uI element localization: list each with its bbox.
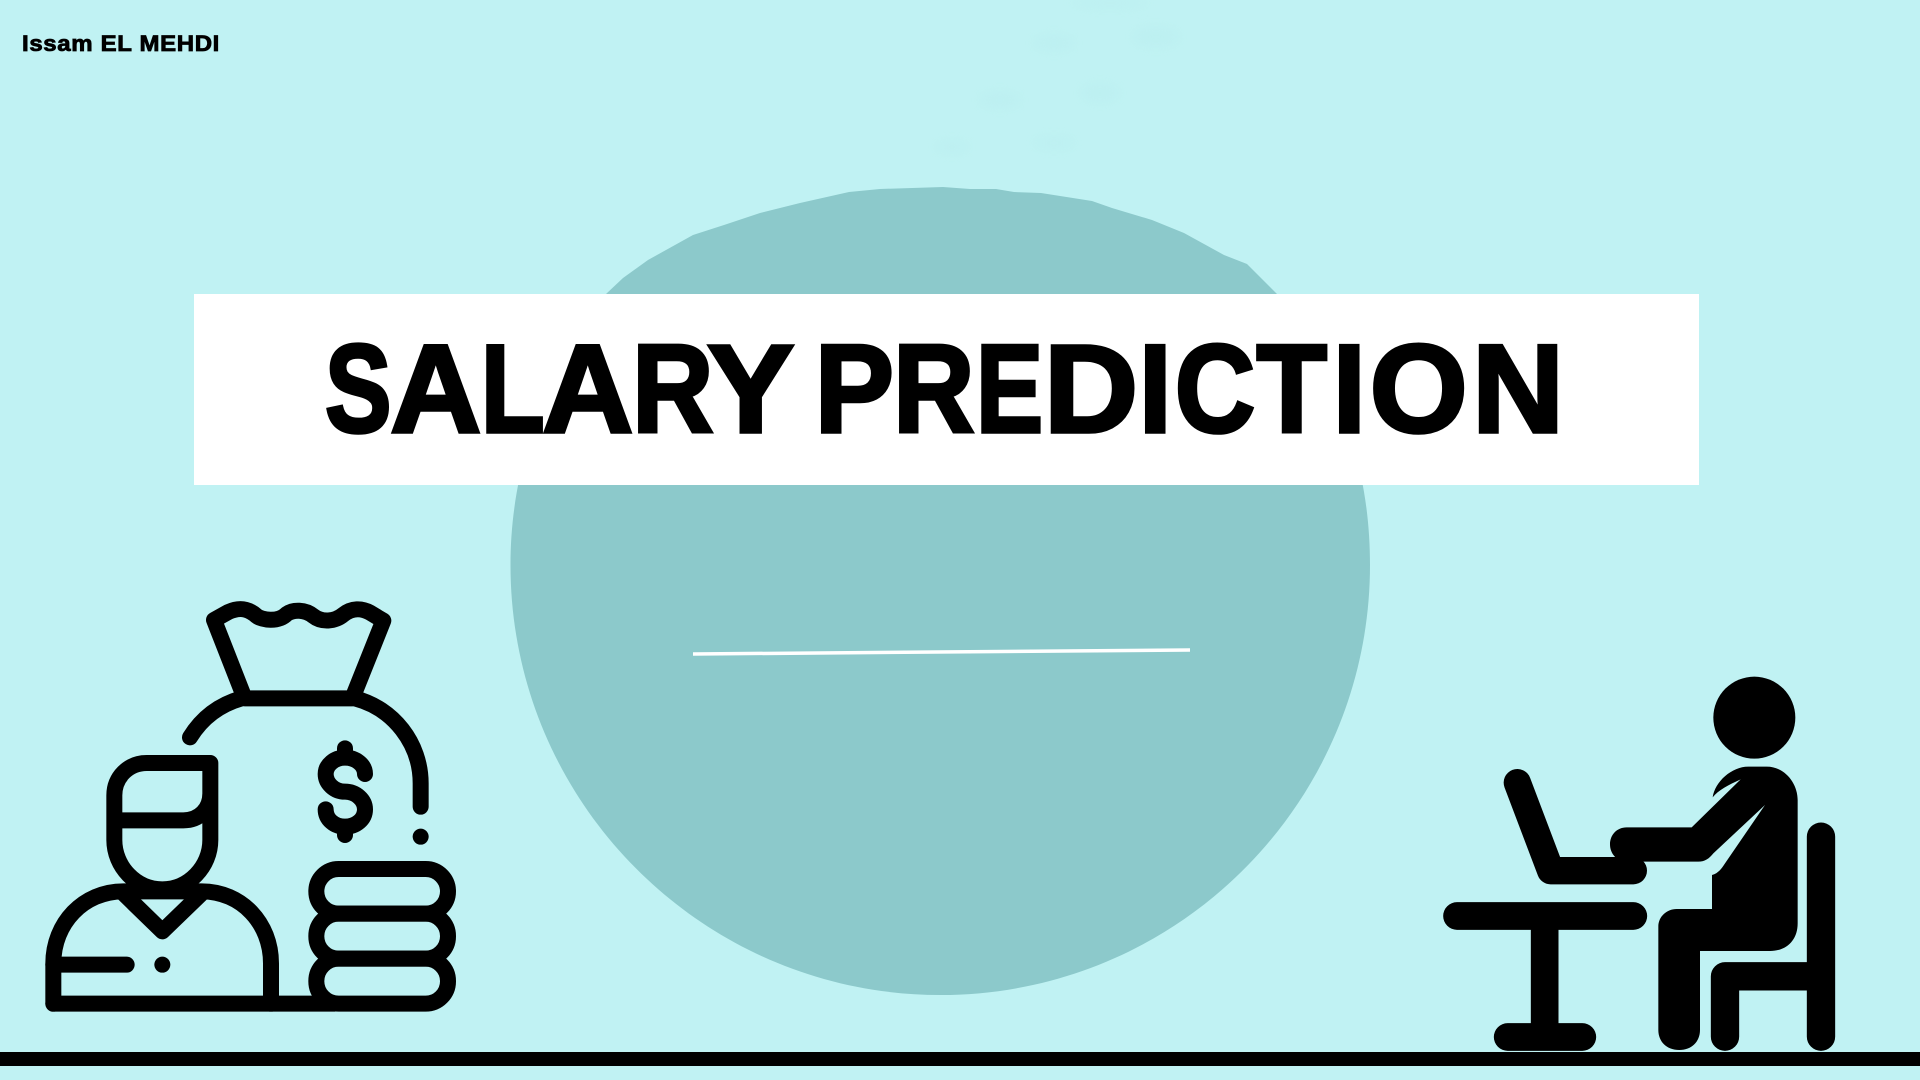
title text: A xyxy=(390,320,481,459)
dollar sign xyxy=(326,748,365,835)
title text: P xyxy=(815,320,894,459)
title text: L xyxy=(481,320,545,459)
title text: R xyxy=(632,320,713,459)
money bag neck and ruffle xyxy=(214,609,383,698)
title text: Y xyxy=(707,320,793,459)
icon: person working at laptop xyxy=(1457,677,1821,1050)
banner background xyxy=(194,294,1699,485)
title text: S xyxy=(325,320,392,459)
coin stack xyxy=(316,869,448,1004)
icon: man with money bag and coins xyxy=(53,609,448,1004)
money bag body xyxy=(190,698,421,807)
title text: C xyxy=(1175,320,1255,459)
title banner xyxy=(194,294,1699,485)
table xyxy=(1457,916,1633,1037)
title text: I xyxy=(1139,320,1172,459)
title text: N xyxy=(1472,320,1564,459)
collar xyxy=(123,893,202,931)
money bag dot xyxy=(413,829,429,845)
title text: T xyxy=(1256,320,1327,459)
teal circle backdrop xyxy=(510,187,1370,995)
title text: A xyxy=(542,320,633,459)
title text: O xyxy=(1370,320,1468,459)
title text: E xyxy=(976,320,1043,459)
button dot xyxy=(154,957,170,973)
base line xyxy=(53,980,333,1028)
white divider line xyxy=(693,650,1190,654)
laptop xyxy=(1517,783,1633,871)
title text: D xyxy=(1044,320,1138,459)
head xyxy=(1713,677,1795,759)
ground line xyxy=(0,1052,1920,1066)
head and hair xyxy=(114,763,210,889)
title text: I xyxy=(1333,320,1366,459)
title text: R xyxy=(893,320,974,459)
chair xyxy=(1725,837,1821,1037)
arm line xyxy=(53,941,127,989)
body xyxy=(1610,767,1798,1050)
author name: Issam EL MEHDI xyxy=(22,31,220,56)
shoulders xyxy=(53,891,271,1004)
